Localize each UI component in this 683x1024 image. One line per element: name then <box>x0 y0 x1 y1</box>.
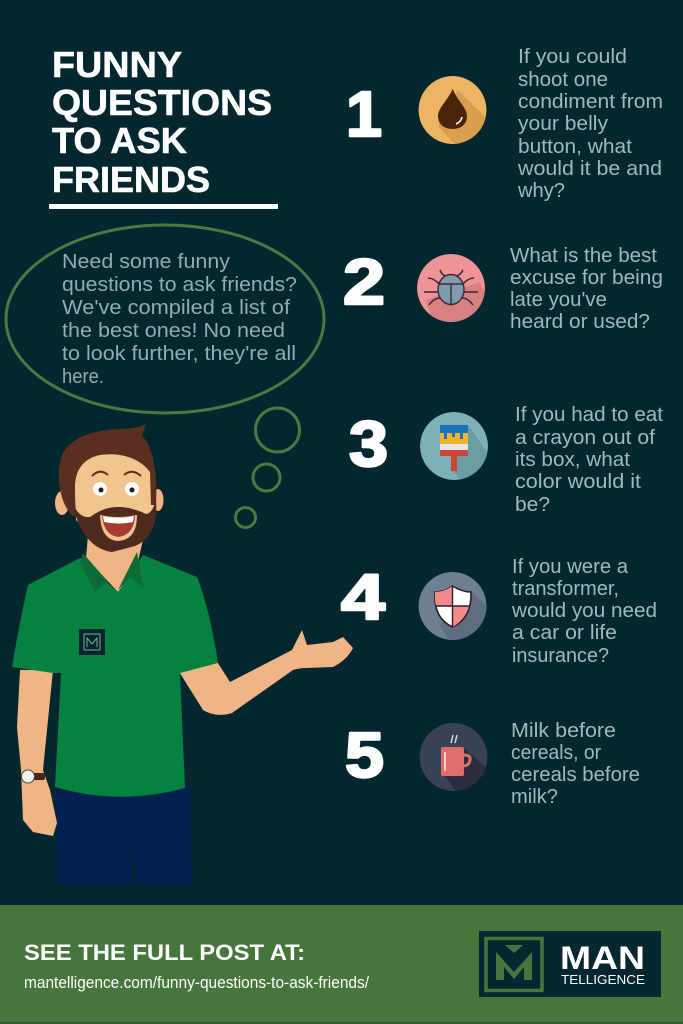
question 3: If you had to eat <box>515 404 663 426</box>
question 2: excuse for being <box>510 267 663 289</box>
question 1 <box>517 46 663 202</box>
question 4 <box>511 556 657 667</box>
question 4: a car or life <box>512 622 617 644</box>
number 1: 1 <box>346 78 382 150</box>
eyes <box>93 482 139 496</box>
title: TO ASK <box>52 120 187 161</box>
character illustration <box>12 424 353 885</box>
question 3: color would it <box>515 471 641 493</box>
question 4: would you need <box>511 600 657 622</box>
mouth <box>100 515 137 541</box>
icon: shield <box>418 572 486 640</box>
logo mark <box>486 938 542 990</box>
logo wordmark: TELLIGENCE <box>561 973 645 987</box>
eyebrows <box>92 472 141 476</box>
question 4: transformer, <box>512 578 619 600</box>
title: FRIENDS <box>52 159 210 200</box>
ears <box>55 491 69 515</box>
question 5: Milk before <box>511 720 616 742</box>
question 3: be? <box>515 494 550 516</box>
number 5: 5 <box>345 719 384 791</box>
shirt logo <box>79 629 105 655</box>
question 1: why? <box>517 180 565 202</box>
question 3: its box, what <box>515 449 630 471</box>
face <box>74 453 155 540</box>
question 5: milk? <box>511 786 558 808</box>
question 2 <box>510 245 663 333</box>
footer band <box>0 905 683 1024</box>
question 1: would it be and <box>517 158 662 180</box>
question 1: your belly <box>518 113 608 135</box>
question 3: a crayon out of <box>515 427 655 449</box>
beard <box>73 500 156 552</box>
icon: coffee mug <box>420 723 488 791</box>
logo wordmark <box>560 940 645 987</box>
number 3: 3 <box>349 408 388 480</box>
question 4: If you were a <box>512 556 629 578</box>
item 1 <box>346 46 663 202</box>
question 1: shoot one <box>518 69 608 91</box>
hair <box>59 424 156 516</box>
neck <box>86 535 143 592</box>
item 2 <box>344 247 662 328</box>
question 1: condiment from <box>518 91 663 113</box>
logo wordmark: MAN <box>560 940 645 976</box>
number 4: 4 <box>341 561 386 633</box>
watch <box>22 770 45 783</box>
item 4 <box>341 556 657 667</box>
trousers <box>55 785 192 885</box>
question 4: insurance? <box>512 645 609 667</box>
question 2: late you've <box>510 289 607 311</box>
title <box>52 44 272 200</box>
shirt <box>12 555 218 797</box>
item 3 <box>349 404 663 516</box>
question 5 <box>511 720 640 808</box>
collar <box>80 552 143 592</box>
question 1: If you could <box>518 46 627 68</box>
footer heading: SEE THE FULL POST AT: <box>24 940 305 965</box>
intro text <box>62 251 297 388</box>
thought bubble <box>6 225 324 528</box>
question 3 <box>515 404 663 516</box>
intro text: Need some funny <box>62 251 230 273</box>
icon: oil drop <box>418 76 486 144</box>
icon: paint brush <box>420 412 488 480</box>
title: FUNNY <box>52 44 182 85</box>
intro text: the best ones! No need <box>62 320 285 342</box>
question 2: What is the best <box>510 245 657 267</box>
title: QUESTIONS <box>52 82 272 123</box>
number 2: 2 <box>343 246 385 318</box>
question 1: button, what <box>518 136 632 158</box>
left arm <box>17 670 57 836</box>
question 5: cereals, or <box>511 742 601 764</box>
intro text: to look further, they're all <box>62 343 296 365</box>
right arm and hand <box>178 630 353 715</box>
title underline <box>49 204 278 209</box>
icon: bug <box>417 254 485 322</box>
logo <box>479 931 661 997</box>
question 2: heard or used? <box>510 311 650 333</box>
footer url: mantelligence.com/funny-questions-to-ask-friends/ <box>24 974 369 992</box>
intro text: questions to ask friends? <box>62 274 297 296</box>
item 5 <box>346 722 640 803</box>
intro text: We've compiled a list of <box>62 297 290 319</box>
question 5: cereals before <box>511 764 640 786</box>
intro text: here. <box>62 366 104 388</box>
